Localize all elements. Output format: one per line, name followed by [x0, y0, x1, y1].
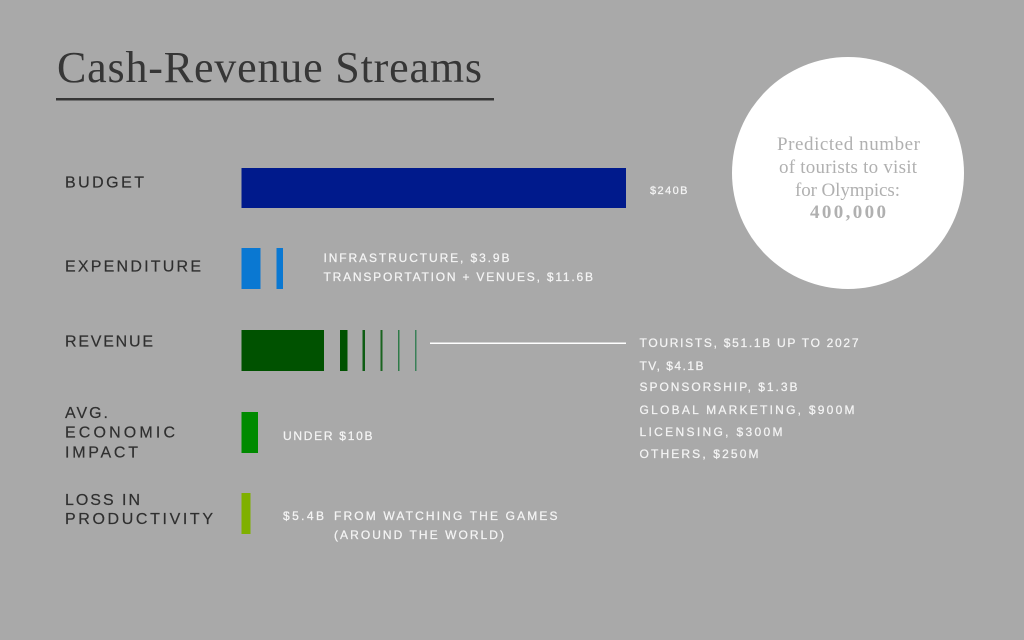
- row: expenditure: TRANSPORTATION + VENUES, $11.6B: [324, 270, 593, 284]
- row: revenue: GLOBAL MARKETING, $900M: [640, 403, 854, 417]
- row: loss in productivity: $5.4B: [283, 509, 324, 523]
- row: expenditure: EXPENDITURE: [65, 258, 201, 276]
- row: revenue: OTHERS, $250M: [640, 447, 758, 461]
- callout: predicted tourists circle: 400,000: [810, 202, 886, 223]
- row: budget: $240B: [650, 185, 688, 197]
- callout: predicted tourists circle: of tourists to visit: [779, 157, 918, 178]
- row: revenue: SPONSORSHIP, $1.3B: [640, 380, 798, 394]
- row: loss in productivity: FROM WATCHING THE GAMES: [334, 509, 558, 523]
- row: budget: BUDGET: [65, 174, 144, 192]
- row: revenue: [65, 330, 859, 461]
- row: revenue: TOURISTS, $51.1B UP TO 2027: [640, 336, 859, 350]
- row: loss in productivity: [65, 492, 558, 542]
- row: expenditure: INFRASTRUCTURE, $3.9B: [324, 251, 510, 265]
- row: loss in productivity: LOSS IN: [65, 492, 140, 509]
- row: revenue: TV, $4.1B: [640, 359, 704, 373]
- row: revenue: LICENSING, $300M: [640, 425, 782, 439]
- callout: predicted tourists circle: for Olympics:: [795, 180, 900, 201]
- row: loss in productivity: PRODUCTIVITY: [65, 511, 213, 528]
- callout: predicted tourists circle: Predicted number: [777, 134, 921, 155]
- row: average economic impact: IMPACT: [65, 444, 138, 462]
- row: average economic impact: [65, 405, 372, 462]
- row: revenue: REVENUE: [65, 334, 153, 350]
- callout: predicted tourists circle: [732, 57, 964, 289]
- row: average economic impact: AVG.: [65, 405, 108, 422]
- row: loss in productivity: (AROUND THE WORLD): [334, 528, 504, 542]
- title: Cash-Revenue Streams: [57, 43, 482, 92]
- row: expenditure: [65, 248, 593, 289]
- row: average economic impact: ECONOMIC: [65, 424, 175, 442]
- row: average economic impact: UNDER $10B: [283, 429, 372, 443]
- row: budget: [65, 168, 688, 208]
